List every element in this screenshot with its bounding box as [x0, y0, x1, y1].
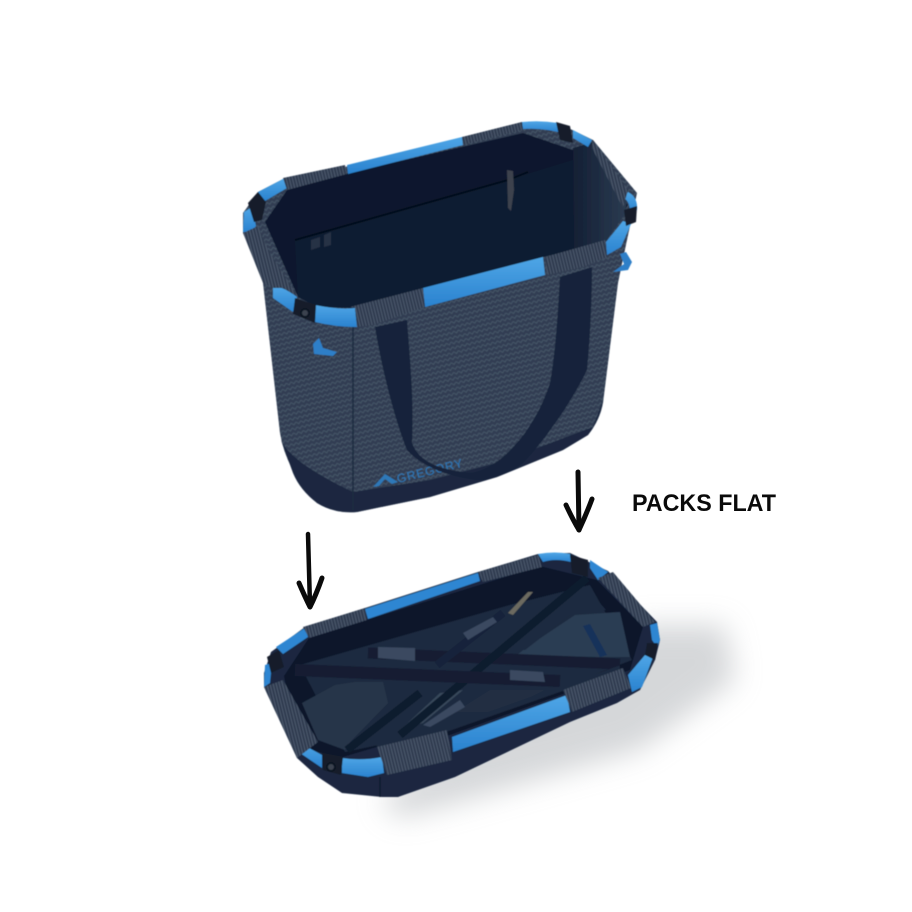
flat bag interior: [284, 566, 643, 757]
frame bar: main diagonal: [400, 578, 587, 735]
front left corner rail: [300, 743, 322, 768]
right clip: [624, 206, 637, 226]
rear clip: [556, 122, 573, 143]
upper bag: open tote: [243, 121, 637, 512]
top right corner rail: [573, 130, 592, 147]
flat clip grommet: [327, 763, 335, 771]
arrow: right: [566, 472, 592, 530]
right rail: [650, 623, 660, 647]
front clip: [293, 298, 316, 323]
front strap: [375, 267, 592, 480]
top left rail: [258, 178, 287, 201]
seam: [379, 777, 381, 797]
rear right grip: [478, 555, 542, 582]
patch four: [423, 700, 465, 727]
arrow: left: [299, 534, 322, 607]
flat corner clips: [267, 555, 658, 775]
right front rail: [606, 221, 631, 255]
flat grip pads: [264, 555, 655, 775]
left clip: [248, 192, 266, 222]
fabric: upper fold: [440, 586, 606, 650]
frame bar: short diagonal: [437, 613, 503, 665]
right grip: [592, 140, 628, 208]
rear clip: [570, 555, 588, 577]
rear rail: [347, 137, 463, 174]
flat bag body: [264, 553, 660, 797]
left grip: [264, 680, 318, 758]
front left grip: [350, 288, 425, 327]
zip pull: [507, 170, 514, 211]
corner clips: [248, 122, 637, 323]
inner labels: [311, 232, 331, 250]
brand logo: [373, 456, 465, 487]
logo wordmark: GREGORY: [395, 456, 465, 486]
rear right rail: [522, 121, 558, 132]
fabric: central lining: [300, 585, 632, 752]
frame bar: back: [368, 653, 620, 664]
front right grip: [545, 240, 607, 275]
front left grip: [377, 730, 452, 775]
patch three: [463, 617, 497, 640]
patch one: [378, 647, 415, 661]
right inner wall: [573, 142, 628, 250]
front corner rail: [315, 305, 357, 327]
patch two: [510, 670, 545, 682]
right clip: [645, 643, 658, 660]
pocket zipper: [295, 172, 528, 240]
front left corner rail: [273, 287, 297, 312]
right blue loop: [613, 252, 632, 272]
top right corner rail: [590, 560, 608, 580]
bag body: [243, 122, 637, 512]
heading: packs flat: PACKS FLAT: [632, 490, 776, 517]
left clip: [267, 650, 284, 673]
fabric: center fold: [400, 690, 463, 730]
fabric: left fold: [302, 682, 388, 750]
lower bag: collapsed tote: [264, 552, 660, 797]
right lower rail: [628, 655, 653, 692]
rear right grip: [462, 122, 523, 145]
interior tag: [583, 624, 607, 657]
right corner rail: [624, 192, 637, 212]
frame bar: lower diagonal: [347, 693, 420, 750]
frame bar: front: [295, 670, 560, 681]
clip grommet: [301, 309, 309, 317]
rear left grip: [283, 165, 347, 190]
corner seam: [352, 327, 354, 510]
front center rail: [423, 257, 545, 307]
front right grip: [563, 668, 631, 712]
bag interior: [265, 133, 628, 308]
left blue loop: [313, 338, 337, 356]
velcro patches: [378, 617, 545, 727]
front clip: [322, 753, 343, 775]
top right rail: [538, 552, 571, 562]
top rail: [365, 573, 480, 619]
rear left grip: [303, 608, 367, 638]
left corner rail: [243, 207, 256, 232]
fabric: right fold: [517, 612, 630, 657]
metal clip: [508, 592, 533, 615]
front center rail: [452, 695, 570, 752]
frame bar: lower rail: [377, 668, 620, 747]
fabric: center right fold: [455, 690, 545, 712]
interior pocket panel: [295, 160, 574, 308]
grip pads: [243, 122, 628, 327]
top left rail: [276, 628, 308, 654]
lower bag shadow: [380, 625, 735, 818]
logo mark: [373, 474, 398, 487]
left rail: [264, 663, 272, 687]
bag base: [281, 400, 603, 512]
front corner rail: [342, 757, 384, 777]
right grip: [598, 572, 655, 627]
left grip: [243, 226, 298, 297]
